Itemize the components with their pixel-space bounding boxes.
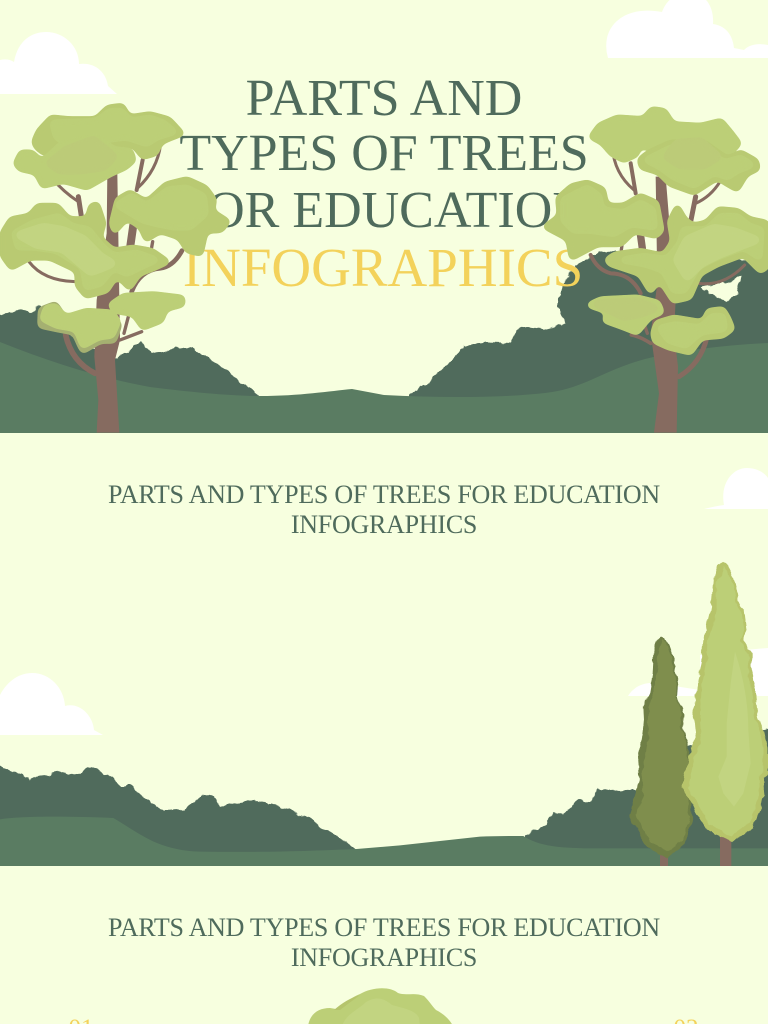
subtitle panel 3: PARTS AND TYPES OF TREES FOR EDUCATION [108, 913, 660, 942]
title line 2: TYPES OF TREES [179, 125, 589, 182]
bottom tree crown [308, 988, 453, 1024]
title line 3: FOR EDUCATION [178, 182, 590, 239]
dark hills left [0, 763, 357, 857]
panel 2 right hills and cypress trees [480, 563, 768, 866]
right tree [547, 110, 768, 433]
light ground left [0, 817, 480, 866]
cypress: olive tree [629, 637, 693, 866]
cloud: right of subtitle [704, 468, 768, 509]
title: PARTS AND [246, 70, 522, 127]
subtitle panel 3 line 2: INFOGRAPHICS [291, 943, 477, 972]
cloud: left panel 2 [0, 673, 103, 735]
left tree [3, 107, 227, 433]
subtitle panel 2: PARTS AND TYPES OF TREES FOR EDUCATION [108, 480, 660, 509]
light ground right [480, 836, 768, 866]
panel 1 hills: dark back hills [0, 250, 768, 420]
cypress: light tree [682, 563, 768, 866]
cloud: top right [606, 0, 768, 58]
small white gap with leaves behind right tree [701, 275, 741, 302]
panel 2 hills [0, 763, 480, 866]
panel 1 hills: light foreground ground [0, 342, 768, 433]
subtitle panel 2 line 2: INFOGRAPHICS [291, 510, 477, 539]
title line 4: infographics: INFOGRAPHICS [183, 237, 583, 298]
cloud: top left [0, 32, 117, 94]
cloud: behind cypress trees [628, 648, 768, 696]
dark hill right [525, 727, 768, 857]
